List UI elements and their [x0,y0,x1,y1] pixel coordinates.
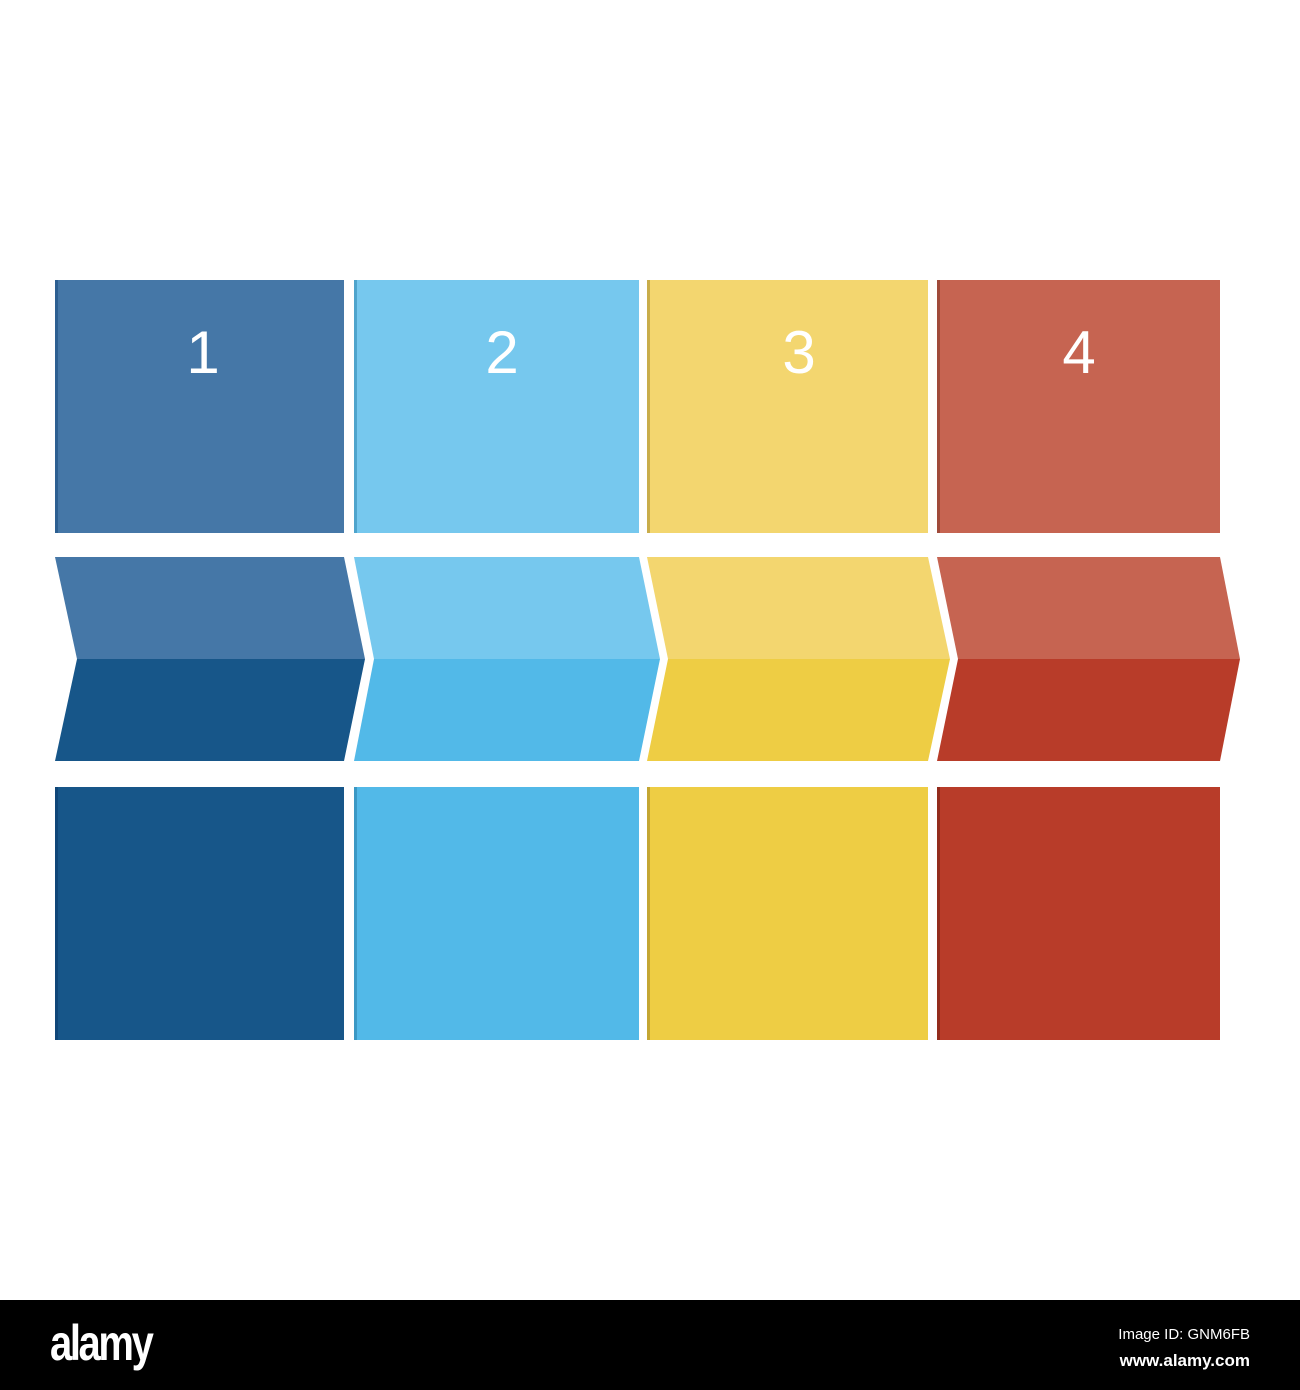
footer bar [0,1300,1300,1390]
number 4: 4 [1062,319,1096,386]
column 3 [647,280,950,1040]
footer id: Image ID: GNM6FB [1118,1326,1250,1343]
column 1 [55,280,365,1040]
column 2 [354,280,660,1040]
footer id: www.alamy.com [1120,1351,1250,1370]
footer logo: alamy [50,1315,151,1371]
number 3: 3 [782,319,816,386]
number 2: 2 [485,319,519,386]
number 1: 1 [186,319,220,386]
column 4 [937,280,1240,1040]
footer id [1118,1326,1250,1370]
